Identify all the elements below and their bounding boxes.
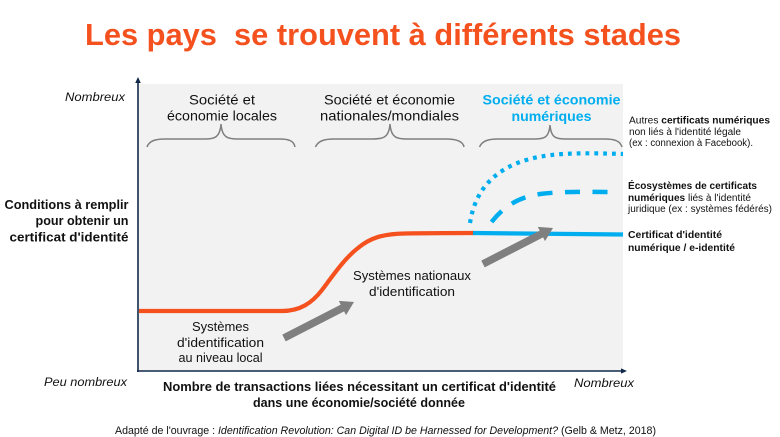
- legend: digital credential ecosystems: numériques liés à l'identité: [628, 193, 751, 204]
- heading: national: [320, 92, 459, 124]
- y axis top label: Nombreux: [65, 90, 126, 104]
- heading: local: économie locales: [167, 108, 277, 124]
- heading: local: Société et: [189, 92, 255, 108]
- heading: local: [167, 92, 277, 124]
- x axis title: dans une économie/société donnée: [253, 396, 465, 410]
- x axis right label: Nombreux: [574, 376, 635, 390]
- y axis title: Conditions à remplir: [4, 198, 129, 212]
- label: national identification systems: Systèmes nationaux: [353, 268, 471, 283]
- x axis arrow: [137, 368, 627, 374]
- x axis title: [163, 380, 556, 410]
- legend: other digital credentials: [629, 116, 770, 149]
- label: local identification systems: Systèmes: [192, 319, 249, 334]
- y axis arrow: [135, 77, 141, 372]
- label: local identification systems: d'identification: [177, 335, 264, 350]
- legend: digital identity: Certificat d'identité: [628, 230, 722, 241]
- legend: other digital credentials: (ex : connexion à Facebook).: [629, 138, 753, 149]
- legend: digital identity: [628, 230, 735, 254]
- y axis title: certificat d'identité: [10, 230, 129, 244]
- legend: other digital credentials: non liés à l'identité légale: [629, 127, 741, 138]
- label: local identification systems: [177, 319, 264, 365]
- source note: Adapté de l'ouvrage : Identification Revolution: Can Digital ID be Harnessed for Development? (Gelb & Metz, 2018): [115, 425, 656, 437]
- x axis title: Nombre de transactions liées nécessitant un certificat d'identité: [163, 380, 556, 394]
- label: national identification systems: [353, 268, 471, 299]
- y axis title: [4, 198, 129, 244]
- heading: national: Société et économie: [324, 92, 455, 108]
- legend: digital credential ecosystems: juridique (ex : systèmes fédérés): [627, 204, 772, 215]
- heading: digital: Société et économie: [482, 92, 621, 108]
- brace: local: [147, 124, 295, 147]
- heading: digital: numériques: [512, 108, 592, 124]
- heading: national: nationales/mondiales: [320, 108, 459, 124]
- line: local and national identification systems: [139, 233, 474, 311]
- x axis left label: Peu nombreux: [44, 375, 128, 389]
- label: national identification systems: d'identification: [369, 284, 455, 299]
- legend: digital identity: numérique / e-identité: [628, 243, 735, 254]
- brace: digital: [480, 125, 622, 147]
- y axis title: pour obtenir un: [36, 214, 128, 228]
- legend: digital credential ecosystems: Écosystèmes de certificats: [628, 179, 757, 192]
- arrow: local to national: [282, 301, 354, 341]
- heading: digital: [482, 92, 621, 124]
- title: Les pays se trouvent à différents stades: [85, 17, 681, 52]
- legend: digital credential ecosystems: [627, 179, 772, 215]
- panel: chart background: [139, 84, 623, 371]
- line: digital credential ecosystems, dashed: [492, 192, 611, 222]
- arrow: national to digital: [481, 227, 553, 267]
- label: local identification systems: au niveau local: [178, 350, 263, 365]
- brace: national: [316, 124, 464, 147]
- legend: other digital credentials: Autres certificats numériques: [629, 116, 770, 126]
- line: digital identity: [473, 233, 623, 234]
- line: other digital credentials, dotted: [470, 153, 623, 223]
